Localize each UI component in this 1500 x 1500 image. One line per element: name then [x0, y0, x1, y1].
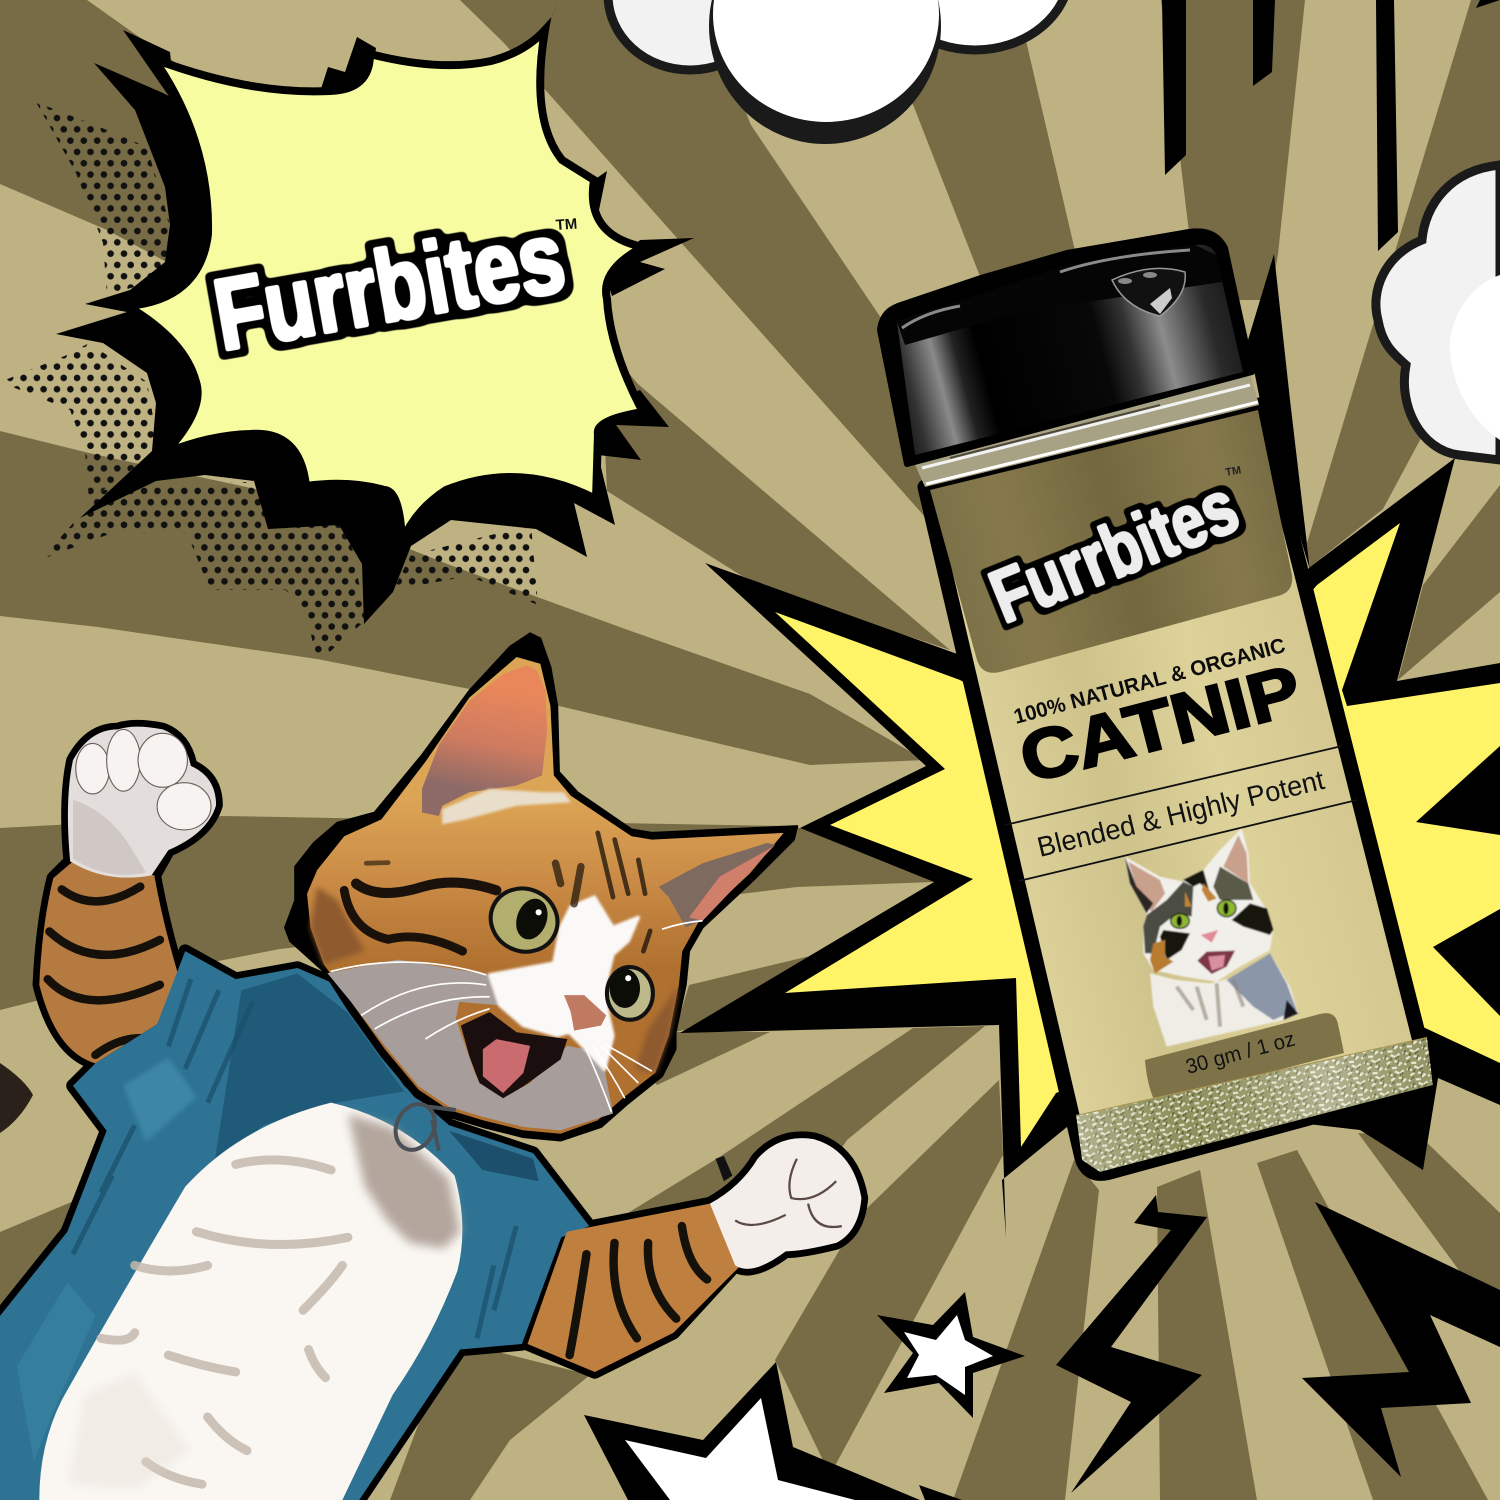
- debris at left edge: [0, 1063, 33, 1133]
- white belly: [39, 1103, 462, 1500]
- weight text: 30 gm / 1 oz: [1183, 1028, 1297, 1079]
- cat silhouette outline: [0, 727, 861, 1500]
- black spike behind bottle: [1248, 254, 1310, 570]
- lightning bolts: [1056, 1195, 1500, 1493]
- small calico cat illustration: [1125, 828, 1298, 1047]
- brown label panel: [930, 410, 1292, 673]
- tagline: 100% NATURAL & ORGANIC: [1011, 634, 1288, 729]
- halftone dots behind speech burst: [0, 102, 538, 663]
- big eye: [480, 878, 568, 963]
- whiskers: [331, 921, 703, 1112]
- top centre cloud: [608, 0, 1070, 144]
- weight pill: [1145, 1013, 1344, 1102]
- bottle cap: [880, 231, 1252, 464]
- descriptor: Blended & Highly Potent: [1034, 764, 1327, 863]
- small white star: [877, 1292, 1025, 1418]
- open mouth: [461, 1012, 567, 1098]
- bottle body: [925, 405, 1427, 1173]
- cheek shading: [310, 887, 365, 965]
- rule lines: [1005, 746, 1357, 881]
- large white star: [584, 1362, 962, 1500]
- ink speed streaks top right: [1162, 0, 1500, 251]
- speech burst with logo: [56, 0, 694, 624]
- tabby cat in blue shirt: [0, 633, 861, 1500]
- bottle logo: Furrbites: [979, 464, 1250, 640]
- cap flip window: [1112, 268, 1185, 316]
- right paw: [710, 1138, 861, 1269]
- bottle trademark: TM: [1224, 464, 1242, 479]
- cat head: [285, 633, 797, 1156]
- cat body: [0, 727, 861, 1500]
- right cloud: [1376, 165, 1500, 460]
- product name: CATNIP: [1012, 650, 1309, 798]
- small eye: [607, 967, 653, 1020]
- sleeve tag: [716, 1156, 732, 1181]
- right ear inner: [659, 843, 775, 928]
- yellow explosion burst behind bottle: [680, 458, 1500, 1238]
- collar ring: [388, 1098, 456, 1156]
- left arm: [39, 861, 180, 1063]
- blue shirt: [0, 951, 589, 1500]
- trademark: TM: [555, 216, 578, 234]
- right arm: [528, 1204, 741, 1372]
- bottle neck: [912, 372, 1259, 487]
- left ear inner: [422, 665, 547, 816]
- logo: Furrbites: Furrbites: [206, 199, 572, 373]
- nose: [564, 995, 606, 1031]
- white blaze and muzzle: [490, 897, 638, 1069]
- grey jaw: [327, 960, 613, 1130]
- left paw: [68, 727, 216, 878]
- herb window: [1076, 1037, 1433, 1172]
- bottle: [880, 231, 1433, 1173]
- fur stripes: [344, 833, 650, 951]
